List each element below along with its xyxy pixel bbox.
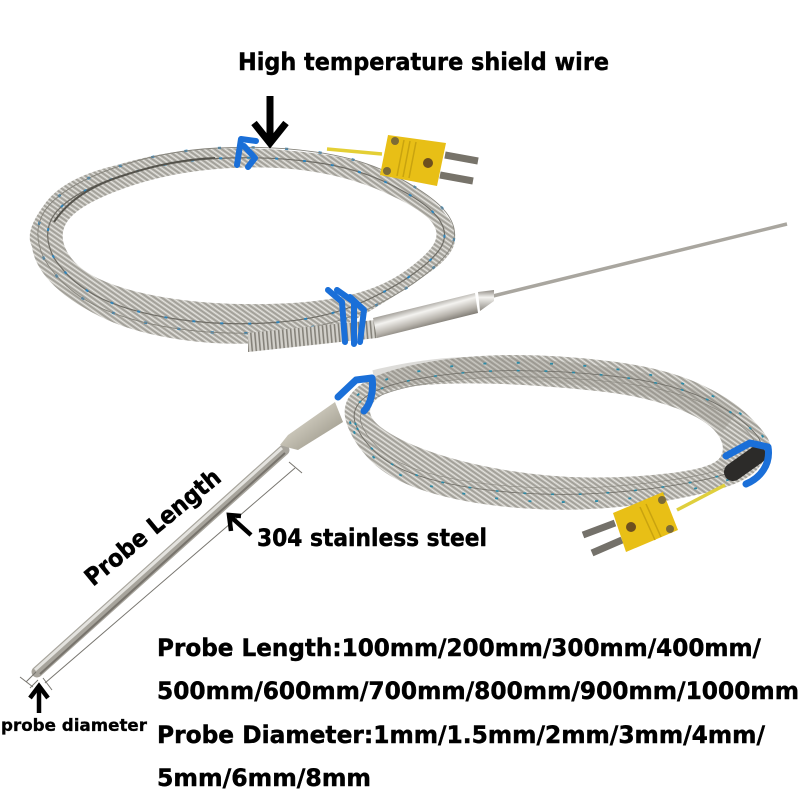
blue ties on coil 1 — [237, 139, 364, 344]
wire lead and connector 1 — [327, 135, 478, 186]
arrow: shield wire — [254, 96, 286, 143]
specification: probe length options: 500mm/600mm/700mm/800mm/900mm/1000mm — [157, 677, 799, 705]
arrow: probe diameter — [30, 686, 48, 713]
label: probe length: Probe Length — [79, 463, 226, 592]
specification: probe length options — [157, 634, 799, 705]
cable coil 2 — [345, 355, 770, 510]
specification: probe diameter options — [157, 721, 765, 792]
cable coil 1 — [30, 147, 455, 344]
specification: probe diameter options: Probe Diameter:1mm/1.5mm/2mm/3mm/4mm/ — [157, 721, 765, 749]
blue ties and dark wire on coil 2 — [338, 378, 768, 484]
specification: probe diameter options: 5mm/6mm/8mm — [157, 764, 371, 792]
probe length and diameter dimension lines — [20, 462, 302, 690]
specification: probe length options: Probe Length:100mm/200mm/300mm/400mm/ — [157, 634, 761, 662]
probe 1 spring, sleeve and needle — [248, 224, 787, 352]
probe 2 sleeve and needle — [35, 402, 343, 674]
wire lead and connector 2 — [583, 485, 725, 553]
label: probe diameter: probe diameter — [1, 716, 148, 736]
heading: high temperature shield wire: High temperature shield wire — [238, 48, 609, 76]
label: 304 stainless steel: 304 stainless steel — [257, 524, 487, 552]
arrow: stainless steel — [229, 515, 251, 535]
